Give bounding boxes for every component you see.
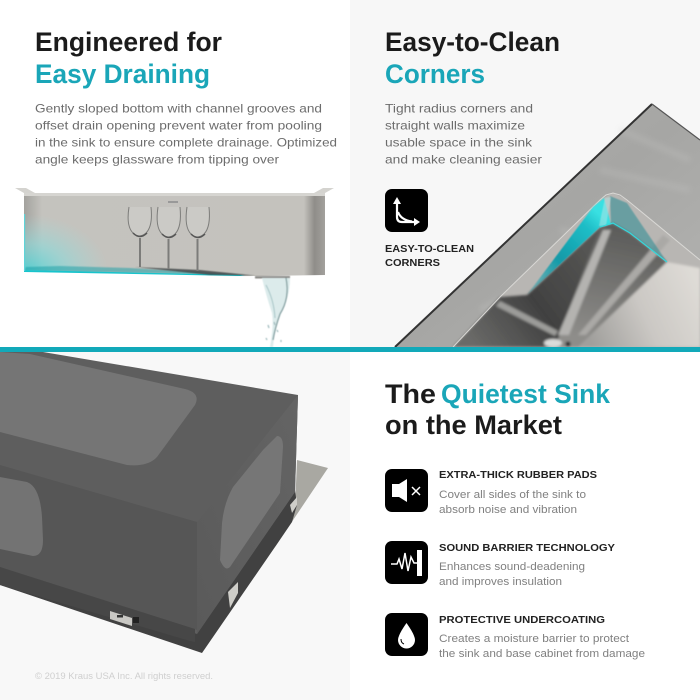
feature: protective undercoating: the sink and base cabinet from damage (439, 648, 645, 660)
icon: sound wave against barrier (385, 541, 428, 584)
label: easy-to-clean corners: CORNERS (385, 258, 440, 269)
text block: corners description: usable space in the sink (385, 136, 533, 150)
text block: corners description: and make cleaning easier (385, 152, 542, 166)
icon: water drop (385, 613, 428, 656)
feature: sound barrier technology: Enhances sound-deadening (439, 561, 585, 573)
heading: the quietest sink on the market: on the Market (385, 410, 562, 440)
feature: protective undercoating: PROTECTIVE UNDERCOATING (439, 615, 605, 626)
feature: protective undercoating: Creates a moisture barrier to protect (439, 633, 629, 645)
heading: easy-to-clean corners: Corners (385, 59, 485, 89)
heading: easy-to-clean corners (385, 27, 560, 89)
heading: engineered for easy draining: Easy Draining (35, 59, 210, 89)
teal highlight on corner (527, 196, 667, 295)
feature: sound barrier technology: and improves insulation (439, 576, 562, 588)
rubber pad: front (0, 477, 43, 556)
sink body with rubber pads (0, 352, 298, 653)
sink corner photo (395, 104, 700, 347)
panel: underside of sink (0, 352, 328, 682)
label: easy-to-clean corners: EASY-TO-CLEAN (385, 244, 474, 255)
panel: easy draining (15, 27, 337, 347)
heading: the quietest sink on the market: Quietest Sink (441, 379, 611, 409)
heading: the quietest sink on the market (385, 379, 611, 440)
rubber pad: side (220, 436, 283, 568)
heading: engineered for easy draining: Engineered for (35, 27, 222, 57)
text block: draining description: Gently sloped bottom with channel grooves and (35, 102, 322, 116)
text block: corners description (385, 102, 542, 166)
panel: easy-to-clean corners (385, 27, 700, 347)
feature: sound barrier technology (385, 541, 615, 588)
icon: easy-to-clean corner arrows (385, 189, 428, 232)
label: easy-to-clean corners (385, 244, 474, 269)
feature: extra-thick rubber pads: Cover all sides of the sink to (439, 489, 586, 501)
feature: extra-thick rubber pads: EXTRA-THICK RUBBER PADS (439, 470, 597, 481)
water stream (255, 276, 290, 347)
feature: sound barrier technology: SOUND BARRIER TECHNOLOGY (439, 543, 615, 554)
text block: draining description: in the sink to ensure complete drainage. Optimized (35, 136, 337, 150)
wine glasses (128, 207, 209, 271)
text block: draining description: angle keeps glassware from tipping over (35, 152, 279, 166)
copyright: © 2019 Kraus USA Inc. All rights reserved. (35, 671, 213, 682)
rubber pad: top (0, 352, 197, 465)
heading: engineered for easy draining (35, 27, 222, 89)
heading: easy-to-clean corners: Easy-to-Clean (385, 27, 560, 57)
feature: extra-thick rubber pads (385, 469, 597, 516)
heading: the quietest sink on the market: The (385, 379, 436, 409)
feature: extra-thick rubber pads: absorb noise and vibration (439, 504, 577, 516)
sink cross-section illustration (15, 188, 334, 347)
text block: corners description: Tight radius corners and (385, 102, 533, 116)
divider band (0, 347, 700, 352)
text block: draining description: offset drain opening prevent water from pooling (35, 118, 322, 132)
flange (275, 460, 328, 547)
panel: quietest sink (385, 379, 645, 660)
feature: protective undercoating (385, 613, 645, 660)
mounting clips (110, 497, 297, 626)
text block: draining description (35, 102, 337, 166)
text block: corners description: straight walls maximize (385, 118, 525, 132)
icon: muted speaker (385, 469, 428, 512)
